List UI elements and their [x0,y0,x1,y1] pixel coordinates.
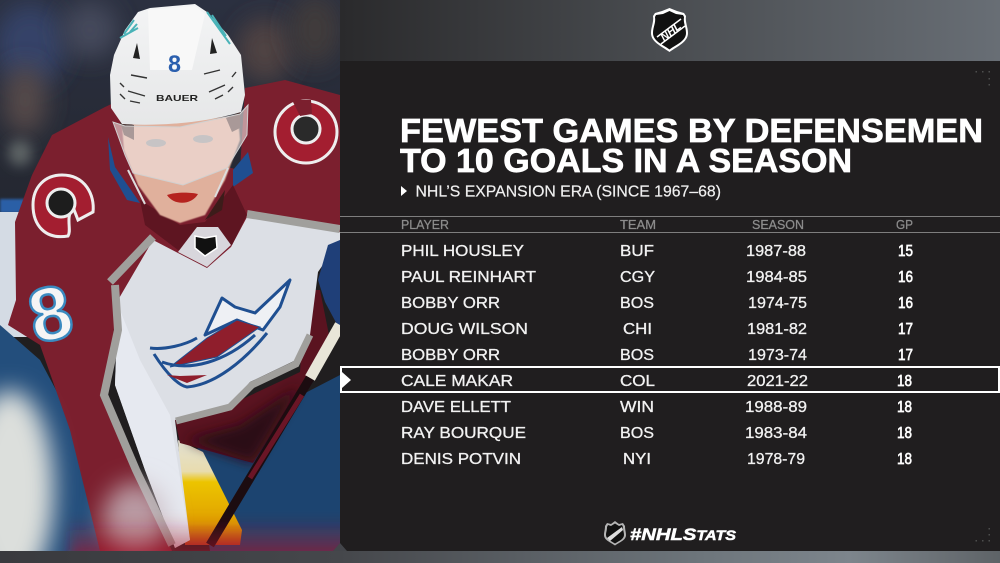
collar patch [178,227,231,267]
table row: Phil Housley: 15 [898,243,913,260]
blurred crowd background [0,0,340,212]
pants right [195,375,340,551]
ice yellow [178,440,242,545]
table row: Ray Bourque: 18 [897,425,912,442]
photo: Cale Makar in Avalanche jersey [0,0,360,563]
visor [113,105,248,185]
pants left [0,325,105,551]
table header: PLAYER [401,218,449,232]
table row: Dave Ellett [401,399,912,416]
table row: Bobby Orr 1973-74: BOBBY ORR [401,347,500,364]
icon: NHL shield logo [651,8,688,52]
table row: Bobby Orr 1974-75 [401,295,913,312]
table row: Doug Wilson [401,321,913,338]
right shoulder C patch [275,100,337,163]
table row: Doug Wilson: 17 [898,321,913,338]
hashtag: #NHLS TATS [630,525,736,544]
highlighted row: Cale Makar: 2021-22 [747,373,808,390]
table row: Doug Wilson: DOUG WILSON [401,321,528,338]
table row: Bobby Orr 1974-75: 1974-75 [748,295,807,312]
table row: Dave Ellett: 18 [897,399,912,416]
corner dots top right [976,71,990,86]
subtitle: NHL’S EXPANSION ERA (SINCE 1967–68) [416,184,721,200]
table row: Dave Ellett: WIN [620,399,654,416]
blue collar right [233,152,253,187]
table row: Bobby Orr 1973-74: 1973-74 [748,347,807,364]
highlighted row: Cale Makar: 18 [897,373,912,390]
table row: Dave Ellett: 1988-89 [745,399,807,416]
table row: Denis Potvin: NYI [623,451,651,468]
blurred foreground [0,390,360,563]
hockey stick [210,325,340,545]
blue collar left [108,137,140,203]
table row: Paul Reinhart: 1984-85 [746,269,807,286]
footer: NHL logo and hashtag [604,521,736,546]
sleeve number: 8 [21,268,80,360]
table row: Phil Housley: PHIL HOUSLEY [401,243,524,260]
title: TO 10 GOALS IN A SEASON [400,143,852,180]
table row: Bobby Orr 1974-75: BOS [620,295,654,312]
face [120,112,240,223]
logo wordmark: NHL [658,20,684,44]
title: FEWEST GAMES BY DEFENSEMEN [400,113,983,150]
helmet [110,4,245,125]
highlighted row: Cale Makar: COL [620,373,655,390]
visor straps [128,168,228,204]
table row: Ray Bourque: RAY BOURQUE [401,425,526,442]
table row: Paul Reinhart: PAUL REINHART [401,269,536,286]
table header: GP [896,218,913,232]
corner dots bottom right [976,528,990,542]
table row: Doug Wilson: CHI [623,321,652,338]
highlighted row: Cale Makar [341,367,999,392]
title [400,113,983,180]
helmet brand: BAUER [156,93,198,103]
rink boards [0,197,28,337]
table row: Denis Potvin: DENIS POTVIN [401,451,521,468]
table row: Denis Potvin [401,451,912,468]
table header: SEASON [752,218,804,232]
Avalanche crest [150,280,290,387]
table row: Bobby Orr 1973-74: 17 [898,347,913,364]
bottom bar [0,543,1000,563]
footer NHL logo [604,521,626,546]
table row: Ray Bourque: BOS [620,425,654,442]
table row: Ray Bourque: 1983-84 [745,425,807,442]
dark neck [140,185,247,250]
white jersey front [115,217,340,548]
table row: Denis Potvin: 18 [897,451,912,468]
table row: Bobby Orr 1974-75: BOBBY ORR [401,295,500,312]
helmet number: 8 [168,51,181,78]
table row: Phil Housley: 1987-88 [746,243,806,260]
table row: Bobby Orr 1974-75: 16 [898,295,913,312]
grey jersey stripes [104,214,340,545]
table row: Bobby Orr 1973-74: BOS [620,347,654,364]
table header: TEAM [620,218,656,232]
left shoulder C patch [33,175,93,237]
table row: Paul Reinhart: CGY [620,269,655,286]
table row: Bobby Orr 1973-74 [401,347,913,364]
table row: Phil Housley: BUF [620,243,654,260]
table row: Ray Bourque [401,425,912,442]
jersey burgundy [8,80,340,551]
glove [318,240,340,330]
table row: Dave Ellett: DAVE ELLETT [401,399,511,416]
table row: Phil Housley [401,243,913,260]
top bar [340,0,1000,61]
table row: Paul Reinhart: 16 [898,269,913,286]
table header [340,216,1000,233]
highlighted row: Cale Makar: CALE MAKAR [401,373,513,390]
table row: Doug Wilson: 1981-82 [747,321,807,338]
table row: Paul Reinhart [401,269,913,286]
table row: Denis Potvin: 1978-79 [747,451,805,468]
